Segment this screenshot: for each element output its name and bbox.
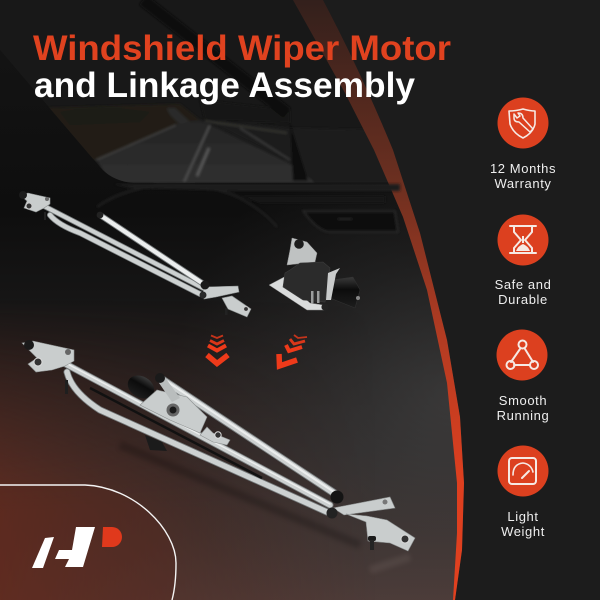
right panel <box>323 0 600 600</box>
shadow and reflection <box>120 445 410 570</box>
label: Smooth <box>499 393 547 408</box>
label: Weight <box>501 524 545 539</box>
title: and Linkage Assembly <box>34 66 416 105</box>
label: Durable <box>498 292 548 307</box>
label: Safe and <box>495 277 551 292</box>
label: Light <box>507 509 539 524</box>
icon: hourglass <box>510 226 536 253</box>
right plate and bracket <box>326 490 415 551</box>
mount bushing <box>294 239 304 249</box>
feature: safe and durable <box>495 214 551 307</box>
label: Warranty <box>494 176 552 191</box>
posts <box>311 291 329 311</box>
label <box>490 161 556 191</box>
label: 12 Months <box>490 161 556 176</box>
lower linkage assembled <box>22 340 415 570</box>
upper linkage part <box>19 191 251 317</box>
title <box>33 29 451 105</box>
windshield photo <box>49 0 388 183</box>
silver base and bracket <box>269 238 325 310</box>
central motor plate <box>140 373 230 445</box>
label <box>501 509 545 539</box>
background <box>0 50 463 600</box>
feature: light weight <box>498 446 548 539</box>
icon: shield wrench <box>509 109 535 138</box>
dashboard and steering wheel <box>97 184 400 232</box>
logo mark <box>32 527 122 568</box>
left plate <box>22 340 74 394</box>
red curved stripe <box>293 0 464 600</box>
label <box>497 393 549 423</box>
motor cylinder <box>326 268 360 308</box>
arrow: diagonal chevrons <box>279 335 307 366</box>
motor under main frame <box>124 371 167 451</box>
linkage bars <box>62 361 337 512</box>
left plate <box>19 191 103 220</box>
arrow: down chevrons <box>207 336 228 364</box>
feature: smooth running <box>496 330 549 423</box>
label <box>495 277 551 307</box>
logo panel <box>0 485 176 600</box>
title: Windshield Wiper Motor <box>33 29 451 68</box>
black gearbox <box>283 262 330 302</box>
icon: gauge <box>509 458 536 484</box>
feature: warranty <box>490 98 556 191</box>
linkage bars <box>40 204 205 294</box>
right plate and bracket <box>200 280 251 317</box>
label: Running <box>497 408 549 423</box>
motor unit <box>269 238 360 311</box>
icon: triangle nodes <box>506 340 538 369</box>
